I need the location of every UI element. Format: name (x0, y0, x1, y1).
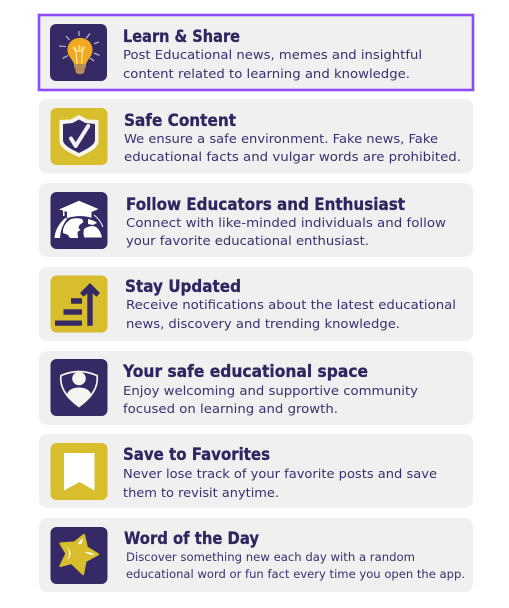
icon: steps with up arrow (50, 276, 108, 332)
description (123, 466, 437, 500)
description: focused on learning and growth. (123, 401, 338, 416)
description: educational word or fun fact every time you open the app. (126, 567, 465, 581)
icon: light bulb (50, 24, 107, 81)
panel: Your safe educational space (39, 351, 473, 425)
heading: Learn & Share (123, 27, 240, 46)
panel: Safe Content (39, 99, 473, 174)
heading: Safe Content (124, 111, 236, 130)
description (126, 215, 446, 248)
description (126, 297, 456, 331)
description (126, 550, 465, 581)
panel: Save to Favorites (39, 434, 473, 508)
description: Post Educational news, memes and insightful (123, 47, 422, 62)
icon: bookmark (50, 443, 108, 500)
icon: shield with check (50, 108, 108, 165)
panel: Word of the Day (39, 518, 473, 592)
description: Receive notifications about the latest educational (126, 297, 456, 312)
heading: Stay Updated (125, 277, 241, 296)
description: Enjoy welcoming and supportive community (123, 383, 418, 398)
icon: person in shield (50, 359, 108, 416)
description (123, 47, 422, 81)
panel: Follow Educators and Enthusiast (39, 183, 473, 257)
panel: Learn & Share (39, 15, 473, 90)
panel: Stay Updated (39, 267, 473, 341)
description: Discover something new each day with a random (126, 550, 415, 564)
heading: Your safe educational space (122, 362, 368, 381)
description: them to revisit anytime. (123, 485, 279, 500)
description (123, 383, 418, 416)
description: your favorite educational enthusiast. (126, 233, 369, 248)
description: news, discovery and trending knowledge. (126, 316, 400, 331)
description: content related to learning and knowledge. (123, 66, 410, 81)
description: We ensure a safe environment. Fake news, Fake (124, 131, 438, 146)
description (124, 131, 461, 164)
heading: Save to Favorites (123, 445, 270, 464)
icon: graduation cap on globe (50, 192, 108, 249)
description: Never lose track of your favorite posts and save (123, 466, 437, 481)
heading: Word of the Day (124, 529, 259, 548)
heading: Follow Educators and Enthusiast (126, 195, 405, 214)
icon: star (50, 527, 108, 584)
description: educational facts and vulgar words are prohibited. (124, 149, 461, 164)
description: Connect with like-minded individuals and follow (126, 215, 446, 230)
